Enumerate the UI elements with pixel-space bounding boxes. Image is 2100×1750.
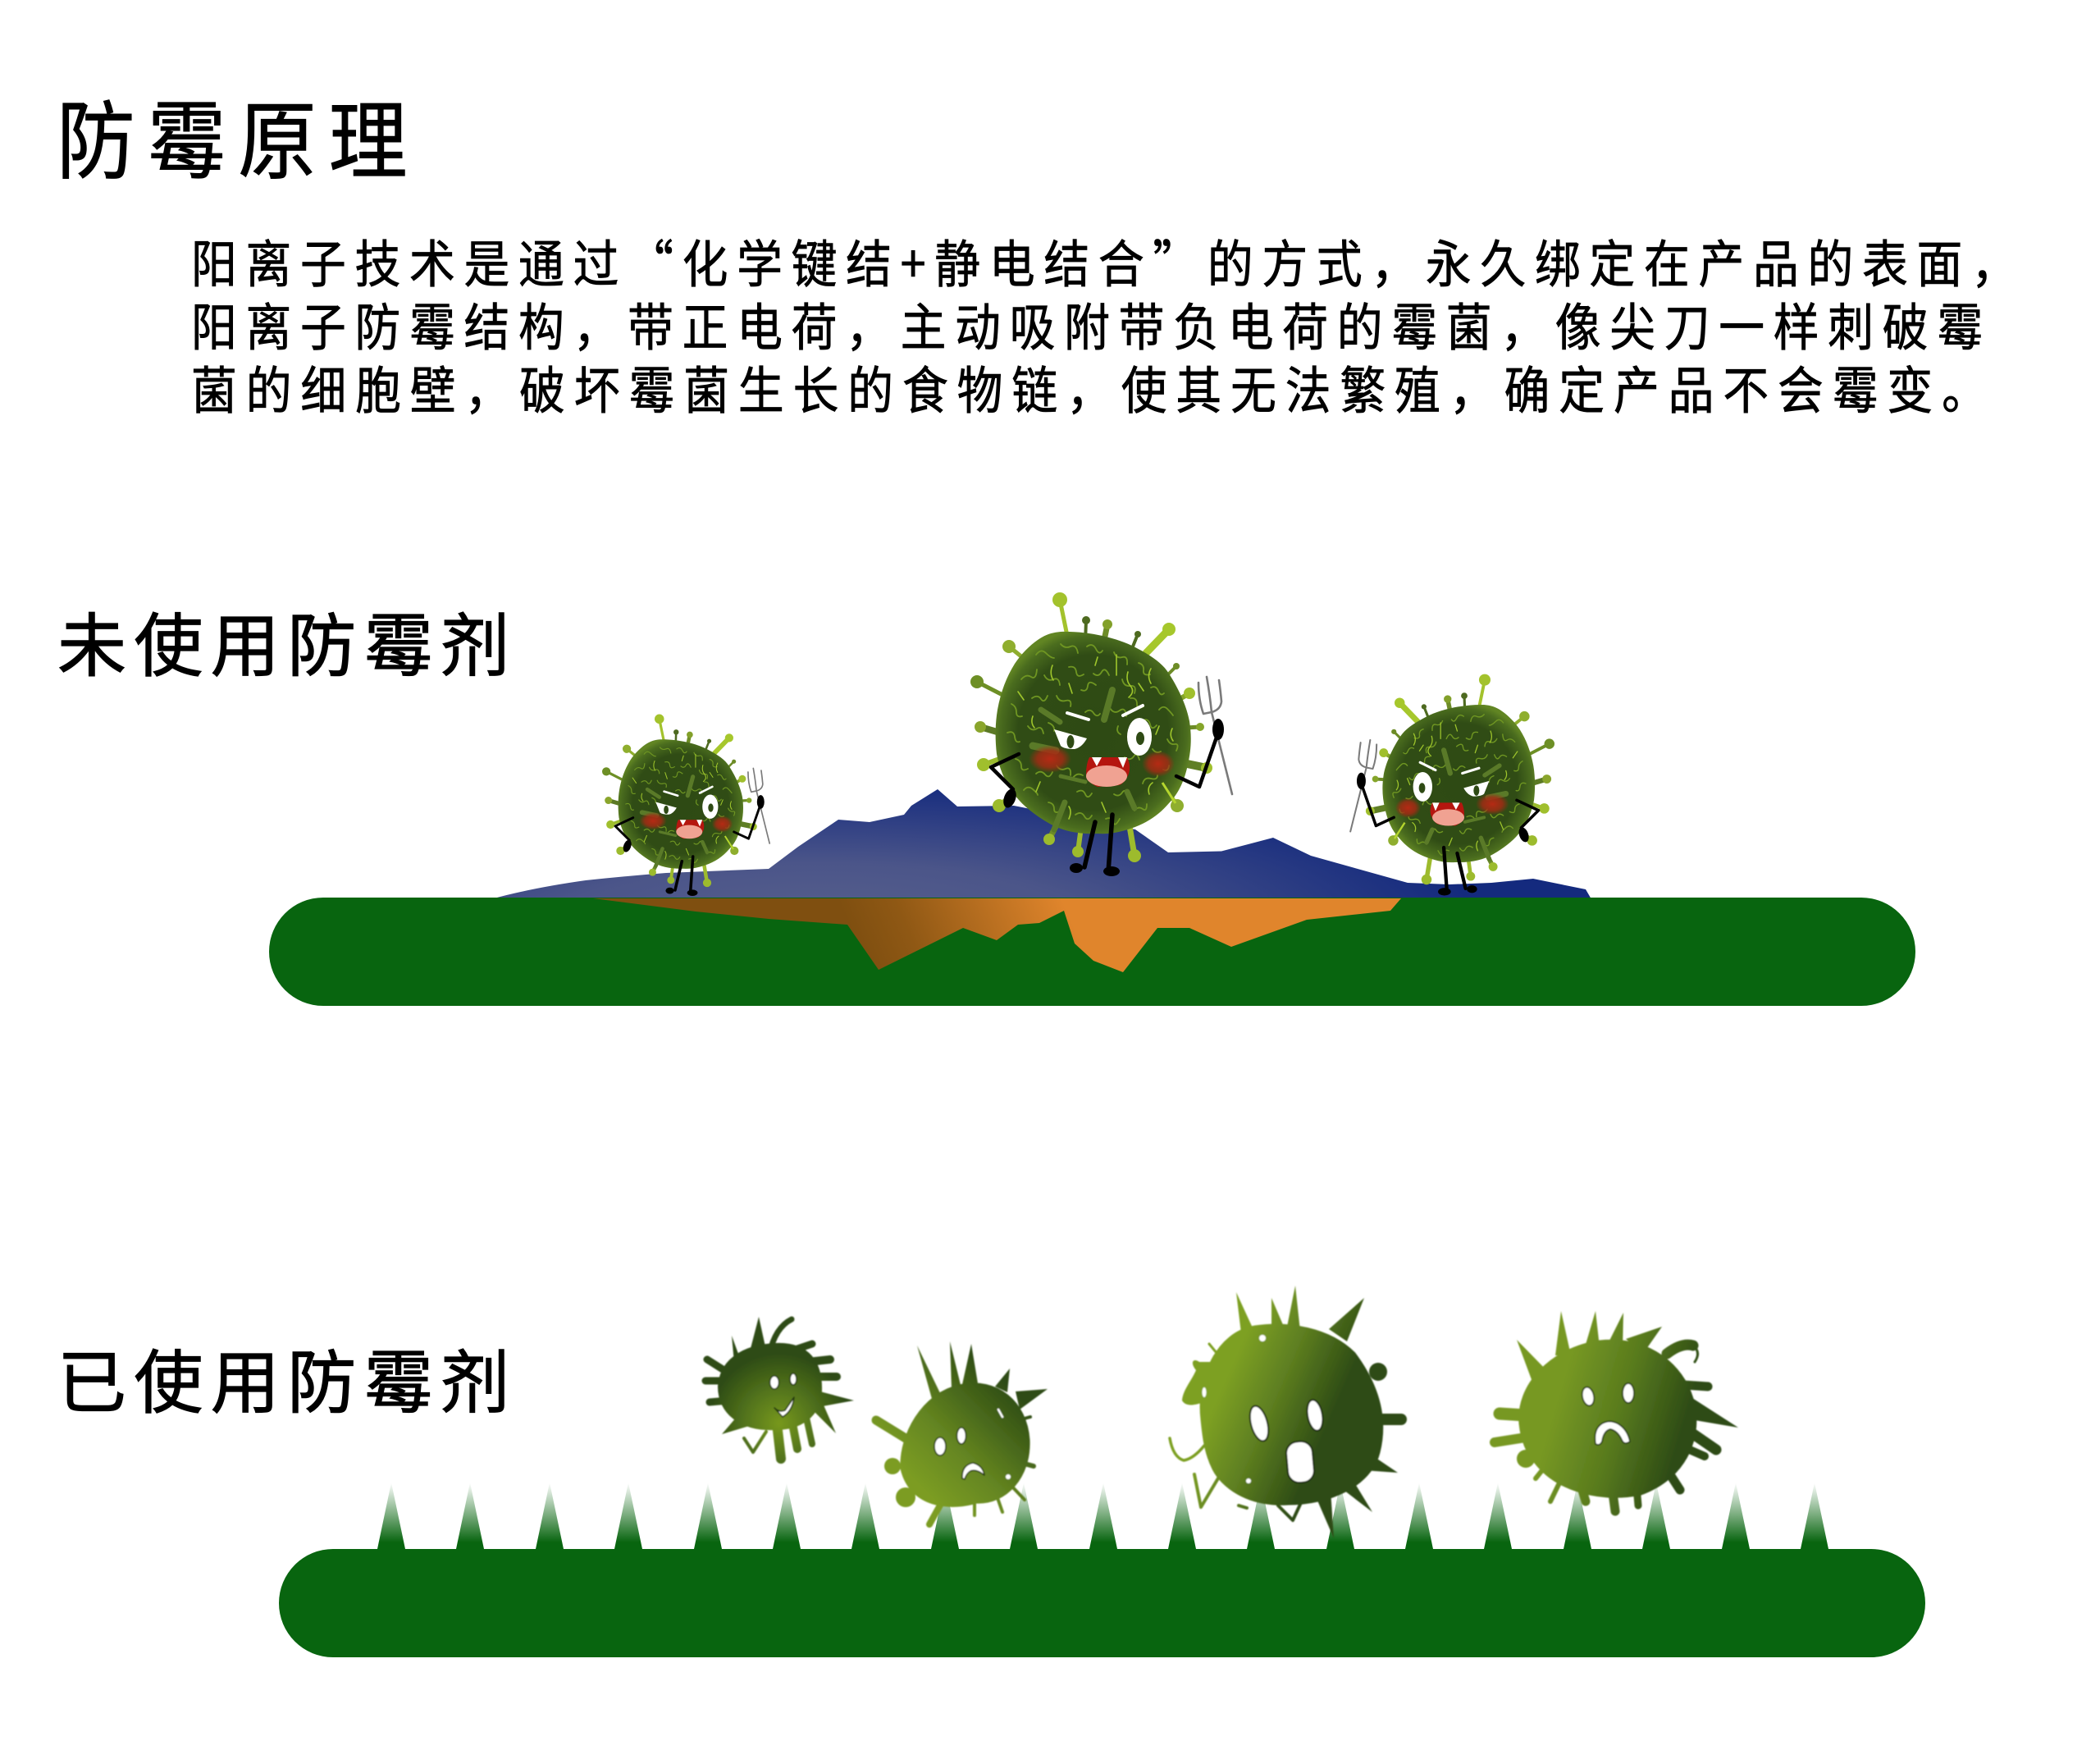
virus: right mirrored [1350, 674, 1554, 896]
dying mold 3 [1170, 1286, 1401, 1538]
green bar: untreated [269, 898, 1915, 1006]
virus: left small [602, 715, 769, 896]
green bar: treated [279, 1549, 1925, 1657]
title: 防霉原理 [57, 72, 419, 196]
text block: description: 菌的细胞壁，破坏霉菌生长的食物链，使其无法繁殖，确定产品不会霉变。 [191, 350, 1997, 423]
heading: with anti-mold agent: 已使用防霉剂 [57, 1328, 517, 1428]
dying mold 2 [876, 1341, 1048, 1524]
mold damage: blue surface [494, 789, 1591, 899]
dying mold 4 [1495, 1311, 1738, 1511]
heading: without anti-mold agent: 未使用防霉剂 [57, 592, 517, 691]
mold damage: orange corrosion [593, 898, 1401, 972]
text block: description: 阳离子技术是通过“化学键结+静电结合”的方式，永久绑定在产品的表面， [191, 223, 2026, 297]
text block: description: 阳离子防霉结构，带正电荷，主动吸附带负电荷的霉菌，像尖刀一样刺破霉 [191, 286, 1992, 360]
virus: center large [970, 592, 1232, 876]
text block: description [191, 223, 2026, 423]
dying mold 1 [705, 1317, 854, 1459]
sharp spikes on treated surface [377, 1483, 1828, 1549]
